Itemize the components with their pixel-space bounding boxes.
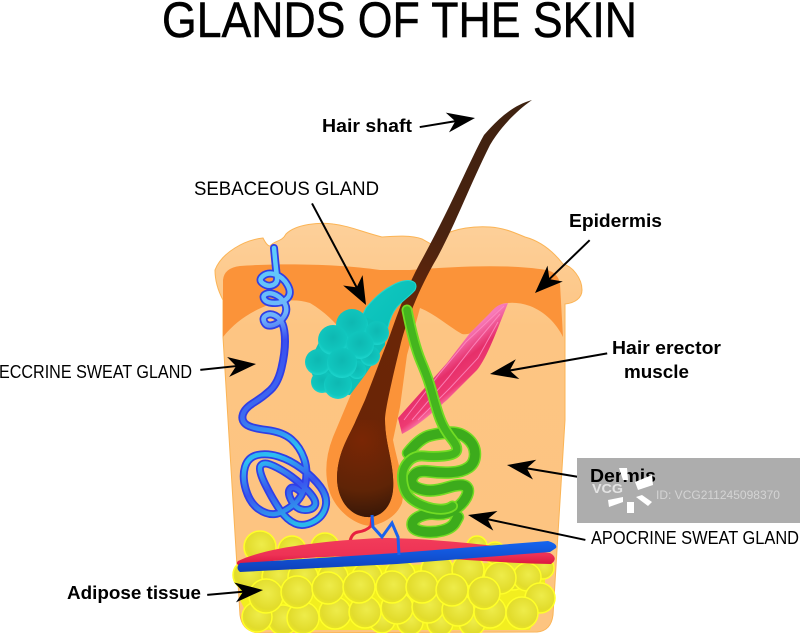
label: hair erector: Hair erector [612,338,721,358]
arrow: hair erector muscle [488,343,609,384]
label: hair shaft: Hair shaft [322,116,412,136]
watermark logo [608,468,653,513]
label: eccrine sweat gland: ECCRINE SWEAT GLAND [0,362,192,382]
arrow: hair shaft [418,108,477,137]
hair erector muscle [398,303,508,434]
apocrine sweat gland [402,310,475,532]
arrow: apocrine sweat gland [466,505,587,550]
sebaceous gland [305,281,416,399]
watermark panel [577,458,800,523]
red blood vessel [237,538,555,566]
small red vessel [350,516,372,541]
small blue vessel [372,515,399,555]
panel: dermis skin block [215,223,582,633]
arrow: adipose tissue [206,580,264,605]
label: epidermis: Epidermis [569,211,662,231]
gland duct [360,281,416,345]
arrow: epidermis [527,232,597,301]
watermark VCG text: VCG [592,481,623,496]
arrow: dermis [505,455,587,488]
gland lobule backing [308,312,385,395]
eccrine sweat gland [242,248,326,525]
label: muscle: muscle [624,362,689,382]
label: sebaceous gland: SEBACEOUS GLAND [194,179,379,200]
hair shaft and root [337,100,532,517]
panel: epidermis layer [223,264,563,526]
watermark id text: ID: VCG211245098370 [656,490,780,502]
blue blood vessel [238,541,556,572]
arrow: sebaceous gland [302,198,376,310]
label: adipose tissue: Adipose tissue [67,583,201,603]
hair bulb [337,420,393,517]
arrow: eccrine sweat gland [199,354,257,380]
adipose tissue fat balls [233,531,555,633]
skin diagram [215,100,582,633]
label: dermis: Dermis [590,466,656,486]
